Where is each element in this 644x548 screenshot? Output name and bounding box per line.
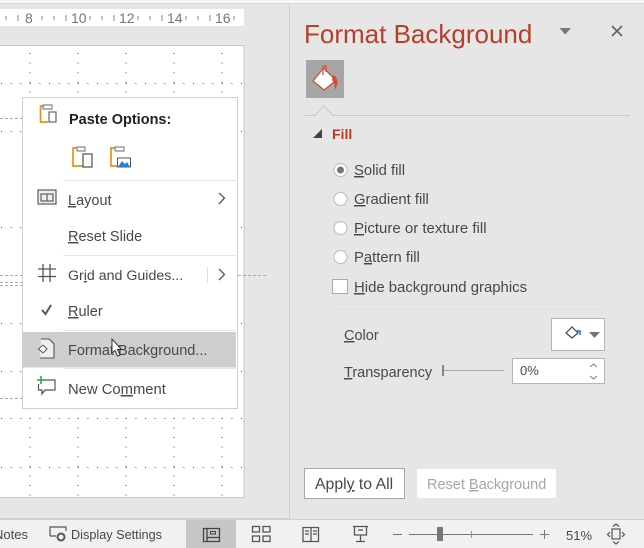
format background item, highlighted	[23, 332, 236, 368]
slide canvas with grid	[0, 46, 268, 498]
icon: close	[612, 26, 622, 36]
icon: mouse cursor	[112, 339, 122, 356]
zoom percent: 51%	[566, 528, 592, 543]
paste options heading: Paste Options:	[69, 112, 171, 128]
fill section heading: Fill	[332, 126, 352, 142]
ruler item	[42, 304, 103, 320]
radio: solid fill: Solid fill	[354, 163, 405, 179]
reset background button	[417, 469, 556, 498]
radio: pattern fill: Pattern fill	[354, 250, 420, 266]
normal view button	[186, 520, 236, 548]
ruler: 10	[71, 10, 87, 26]
icon: slide show	[353, 526, 368, 542]
icon: reading view	[303, 528, 318, 542]
ruler: 16	[215, 10, 231, 26]
new comment item	[37, 376, 166, 398]
status bar	[0, 520, 644, 548]
radio: picture or texture fill: Picture or texture fill	[354, 220, 487, 237]
icon: paste options	[40, 105, 56, 122]
fill section heading	[313, 126, 352, 142]
layout item	[38, 190, 224, 209]
grid and guides item	[38, 264, 224, 284]
display settings: Display Settings	[71, 528, 162, 542]
checkbox: hide background graphics: Hide background graphics	[354, 280, 527, 296]
pane title: Format Background	[304, 19, 532, 49]
apply to all button	[304, 468, 404, 498]
zoom slider	[393, 527, 549, 541]
reset background button: Reset Background	[427, 477, 546, 493]
reset slide item: Reset Slide	[68, 229, 142, 245]
color label: Color	[344, 328, 379, 344]
ruler	[0, 9, 244, 26]
transparency label: Transparency	[344, 365, 433, 381]
ruler: 14	[167, 10, 183, 26]
icon: fill tab	[306, 60, 344, 98]
format background item, highlighted: Format Background...	[68, 343, 207, 359]
icon: fit to window	[608, 524, 624, 544]
transparency input	[512, 358, 604, 384]
transparency input: 0%	[520, 363, 539, 378]
color picker button	[552, 318, 604, 350]
ruler item: Ruler	[68, 304, 103, 320]
ruler: 12	[119, 10, 135, 26]
icon: paste as picture	[111, 147, 130, 167]
context menu	[22, 98, 238, 408]
new comment item: New Comment	[68, 382, 166, 398]
icon: pane dropdown	[560, 28, 571, 34]
grid and guides item: Grid and Guides...	[68, 268, 183, 284]
layout item: Layout	[68, 193, 112, 209]
icon: slide sorter	[252, 526, 270, 542]
radio: gradient fill: Gradient fill	[354, 192, 429, 208]
ruler: 8	[25, 10, 33, 26]
transparency slider	[443, 365, 504, 376]
icon: keep source formatting	[73, 147, 92, 167]
apply to all button: Apply to All	[315, 476, 393, 493]
